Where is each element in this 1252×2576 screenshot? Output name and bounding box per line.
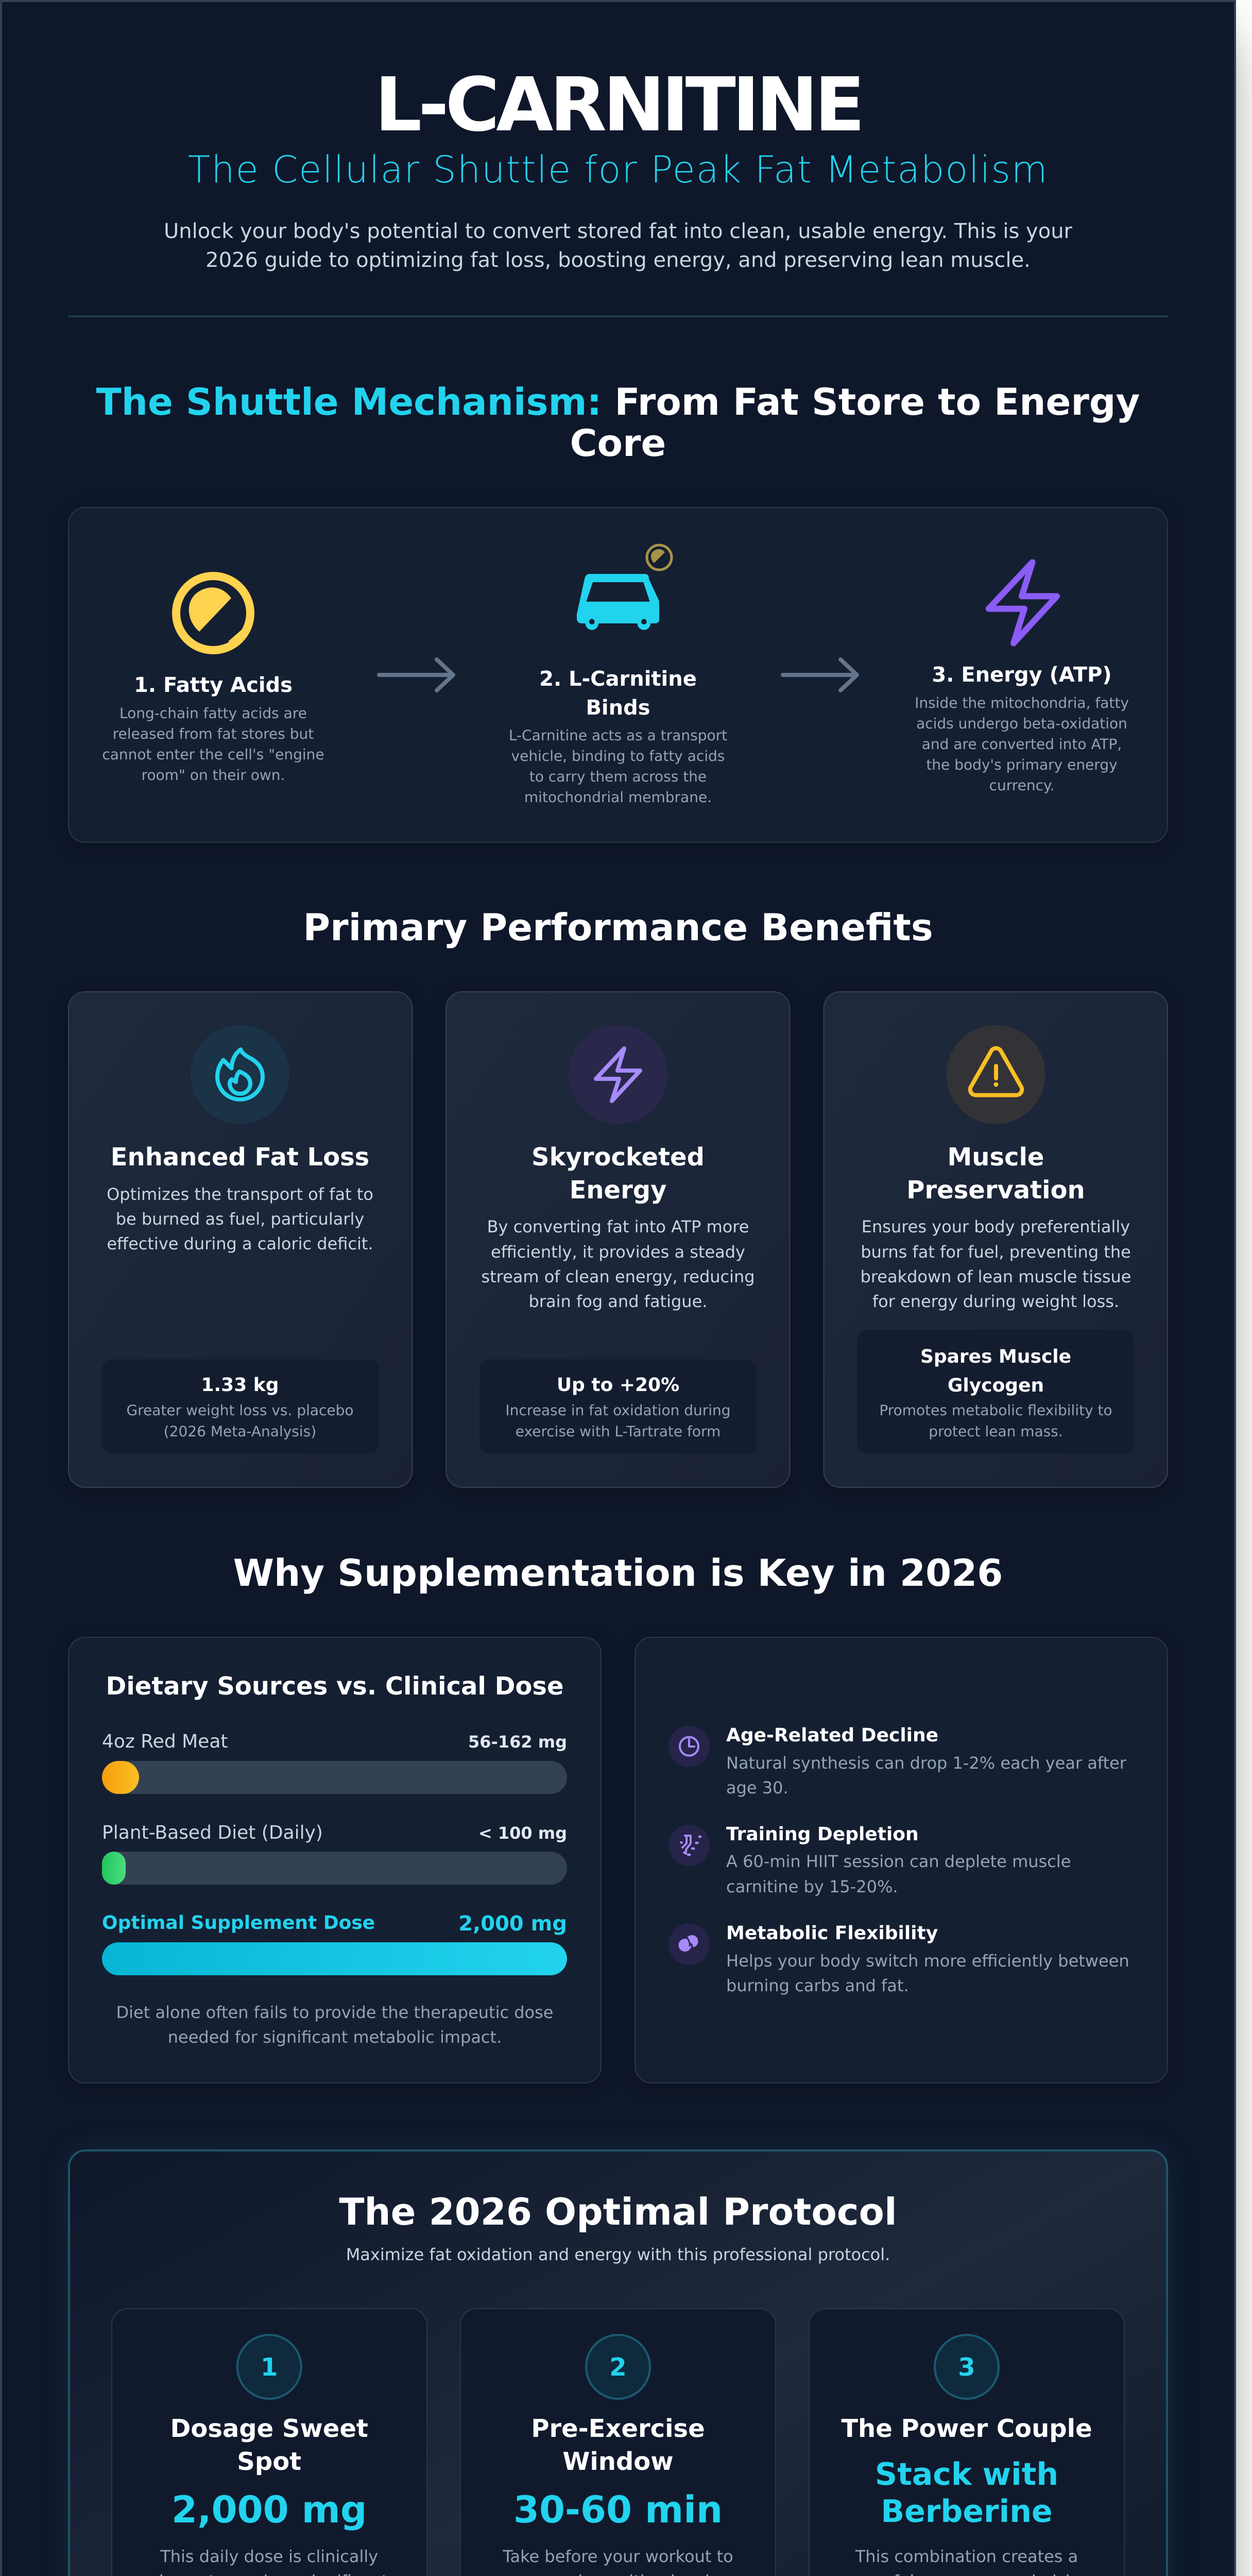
- card 3 description: This combination creates a: [855, 2547, 1078, 2566]
- title: L-CARNITINE: [374, 61, 862, 148]
- step 3 description: [915, 694, 1129, 794]
- benefit description: [481, 1217, 755, 1311]
- benefit title: [531, 1143, 705, 1205]
- step 3: energy: 3. Energy (ATP): [932, 663, 1112, 687]
- bar: plant-based diet: < 100 mg: [478, 1823, 567, 1843]
- stat box: [102, 1359, 379, 1454]
- reason: age-related decline: [668, 1725, 1127, 1798]
- benefit title: Muscle: [948, 1143, 1044, 1172]
- bar: plant-based diet: [102, 1822, 567, 1885]
- panel: dietary sources chart: [68, 1637, 601, 2083]
- step 3 description: currency.: [989, 777, 1054, 794]
- protocol card 2: 30-60 min: [513, 2488, 723, 2531]
- icon: clock: [668, 1726, 710, 1767]
- benefit description: effective during a caloric deficit.: [107, 1234, 373, 1253]
- panel: optimal protocol: The 2026 Optimal Protocol: [339, 2190, 897, 2233]
- protocol card 3: [809, 2309, 1124, 2576]
- benefit description: stream of clean energy, reducing: [481, 1267, 755, 1286]
- heading: shuttle mechanism: Core: [570, 421, 666, 465]
- icon: shuttle bus with fatty acid: [577, 545, 672, 630]
- reason: metabolic flexibility: Helps your body switch more efficiently between: [726, 1951, 1129, 1971]
- intro text: [164, 219, 1073, 272]
- stat box: (2026 Meta-Analysis): [164, 1423, 316, 1440]
- reason: age-related decline: Natural synthesis can drop 1-2% each year after: [726, 1753, 1127, 1773]
- benefit title: Preservation: [906, 1176, 1085, 1205]
- icon: fatty acid circle: [176, 576, 250, 650]
- bar: optimal dose: 2,000 mg: [458, 1912, 567, 1936]
- card 1 description: [143, 2547, 396, 2576]
- reason: metabolic flexibility: burning carbs and fat.: [726, 1976, 909, 1995]
- icon: depletion: [668, 1825, 710, 1866]
- chart footnote: needed for significant metabolic impact.: [168, 2027, 502, 2047]
- step 1 description: room" on their own.: [142, 767, 285, 784]
- step 1: fatty acids: 1. Fatty Acids: [134, 673, 293, 697]
- step 1 description: Long-chain fatty acids are: [119, 705, 307, 722]
- panel: enhanced fat loss: [68, 992, 412, 1487]
- header: [164, 61, 1073, 272]
- stat box: Up to +20%: [557, 1375, 679, 1396]
- heading: shuttle mechanism: [96, 380, 1140, 465]
- stat box: [479, 1359, 757, 1454]
- protocol card 1: [112, 2309, 427, 2576]
- bar: optimal dose: [102, 1912, 567, 1975]
- subtitle: The Cellular Shuttle for Peak Fat Metabolism: [187, 148, 1049, 191]
- stat box: Promotes metabolic flexibility to: [879, 1402, 1112, 1419]
- panel: optimal protocol: Maximize fat oxidation and energy with this professional protocol.: [346, 2245, 890, 2264]
- step 2: l-carnitine binds: Binds: [586, 696, 650, 720]
- step 2 description: [509, 727, 727, 806]
- step 2 description: to carry them across the: [529, 768, 707, 785]
- number badge 2: [586, 2335, 650, 2399]
- panel: reasons: [635, 1637, 1168, 2083]
- stat box: Glycogen: [948, 1375, 1044, 1396]
- stat box: [857, 1330, 1134, 1454]
- benefit description: breakdown of lean muscle tissue: [861, 1267, 1131, 1286]
- icon: energy bolt: [569, 1025, 667, 1124]
- protocol card 2: Window: [562, 2447, 674, 2476]
- protocol card 1: Spot: [237, 2447, 301, 2476]
- step 2 description: mitochondrial membrane.: [524, 789, 712, 806]
- protocol card 2: Pre-Exercise: [531, 2414, 705, 2443]
- protocol card 1: Dosage Sweet: [170, 2414, 368, 2443]
- panel: shuttle mechanism: [68, 507, 1168, 842]
- heading: shuttle mechanism: The Shuttle Mechanism: From Fat Store to Energy: [96, 380, 1140, 423]
- step 3 description: the body's primary energy: [926, 756, 1118, 773]
- arrow: step 2 to 3: [783, 659, 857, 690]
- number badge 3: 3: [958, 2353, 975, 2382]
- step 1 description: [102, 705, 324, 784]
- card 2 description: [486, 2547, 750, 2576]
- card 1 description: This daily dose is clinically: [160, 2547, 378, 2566]
- reason: metabolic flexibility: Metabolic Flexibility: [726, 1923, 938, 1944]
- icon: flame: [191, 1025, 289, 1124]
- step 2 description: vehicle, binding to fatty acids: [511, 748, 725, 765]
- benefit description: By converting fat into ATP more: [487, 1217, 749, 1236]
- icon: lightning bolt: [989, 562, 1057, 643]
- card 2 description: Take before your workout to: [502, 2547, 733, 2566]
- bar: plant-based diet: Plant-Based Diet (Daily): [102, 1822, 323, 1843]
- step 2: l-carnitine binds: [509, 545, 727, 806]
- benefit description: Ensures your body preferentially: [862, 1217, 1130, 1236]
- chart footnote: Diet alone often fails to provide the therapeutic dose: [116, 2003, 553, 2022]
- stat box: Greater weight loss vs. placebo: [126, 1402, 354, 1419]
- bar: optimal dose: Optimal Supplement Dose: [102, 1912, 375, 1934]
- benefit title: Skyrocketed: [531, 1143, 705, 1172]
- number badge 3: [935, 2335, 999, 2399]
- step 2: l-carnitine binds: 2. L-Carnitine: [539, 667, 697, 691]
- protocol card 3: Berberine: [881, 2494, 1053, 2530]
- icon: overlapping circles: [668, 1924, 710, 1965]
- step 2 description: L-Carnitine acts as a transport: [509, 727, 727, 744]
- protocol card 3: The Power Couple: [841, 2414, 1092, 2443]
- reason: training depletion: Training Depletion: [726, 1824, 919, 1845]
- panel: optimal protocol: [69, 2150, 1167, 2576]
- protocol card 1: 2,000 mg: [171, 2488, 367, 2531]
- panel: muscle preservation: [824, 992, 1168, 1487]
- step 3 description: Inside the mitochondria, fatty: [915, 694, 1129, 711]
- benefit description: [107, 1184, 373, 1253]
- stat box: 1.33 kg: [201, 1375, 279, 1396]
- step 1: fatty acids: [102, 576, 324, 784]
- panel: enhanced fat loss: Enhanced Fat Loss: [111, 1143, 369, 1172]
- step 1 description: released from fat stores but: [113, 725, 314, 742]
- bar: red meat: 56-162 mg: [468, 1732, 567, 1752]
- benefit description: efficiently, it provides a steady: [491, 1242, 745, 1262]
- reason: training depletion: [668, 1824, 1071, 1896]
- benefit description: for energy during weight loss.: [872, 1292, 1119, 1311]
- step 1 description: cannot enter the cell's "engine: [102, 746, 324, 763]
- protocol card 2: [460, 2309, 776, 2576]
- step 3: energy: [915, 562, 1129, 794]
- step 3 description: and are converted into ATP,: [922, 736, 1122, 753]
- panel: dietary sources chart: Dietary Sources vs. Clinical Dose: [106, 1672, 564, 1701]
- benefit description: burns fat for fuel, preventing the: [861, 1242, 1131, 1262]
- intro text: Unlock your body's potential to convert stored fat into clean, usable energy. This is your: [164, 219, 1073, 243]
- reason: training depletion: A 60-min HIIT session can deplete muscle: [726, 1852, 1071, 1871]
- stat box: Spares Muscle: [920, 1346, 1071, 1367]
- bar: red meat: 4oz Red Meat: [102, 1731, 228, 1752]
- benefit description: be burned as fuel, particularly: [116, 1209, 364, 1229]
- stat box: protect lean mass.: [929, 1423, 1063, 1440]
- stat box: Increase in fat oxidation during: [505, 1402, 731, 1419]
- number badge 1: 1: [261, 2353, 278, 2382]
- heading: benefits: Primary Performance Benefits: [303, 906, 933, 949]
- number badge 1: [237, 2335, 301, 2399]
- chart footnote: [116, 2003, 553, 2047]
- benefit description: Optimizes the transport of fat to: [107, 1184, 373, 1204]
- intro text: 2026 guide to optimizing fat loss, boosting energy, and preserving lean muscle.: [205, 248, 1031, 272]
- step 3 description: acids undergo beta-oxidation: [916, 715, 1127, 732]
- card 3 description: [842, 2547, 1092, 2576]
- reason: metabolic flexibility: [668, 1923, 1129, 1995]
- stat box: exercise with L-Tartrate form: [516, 1423, 721, 1440]
- benefit description: brain fog and fatigue.: [529, 1292, 707, 1311]
- reason: age-related decline: age 30.: [726, 1778, 788, 1798]
- benefit title: [906, 1143, 1085, 1205]
- number badge 2: 2: [609, 2353, 627, 2382]
- panel: skyrocketed energy: [446, 992, 790, 1487]
- arrow: step 1 to 2: [379, 659, 453, 690]
- benefit description: [861, 1217, 1131, 1311]
- reason: training depletion: carnitine by 15-20%.: [726, 1877, 898, 1896]
- protocol card 3: Stack with: [875, 2456, 1058, 2493]
- icon: warning triangle: [947, 1025, 1045, 1124]
- benefit title: Energy: [570, 1176, 666, 1205]
- reason: age-related decline: Age-Related Decline: [726, 1725, 938, 1746]
- bar: red meat: [102, 1731, 567, 1794]
- heading: why supplementation: Why Supplementation is Key in 2026: [233, 1551, 1003, 1595]
